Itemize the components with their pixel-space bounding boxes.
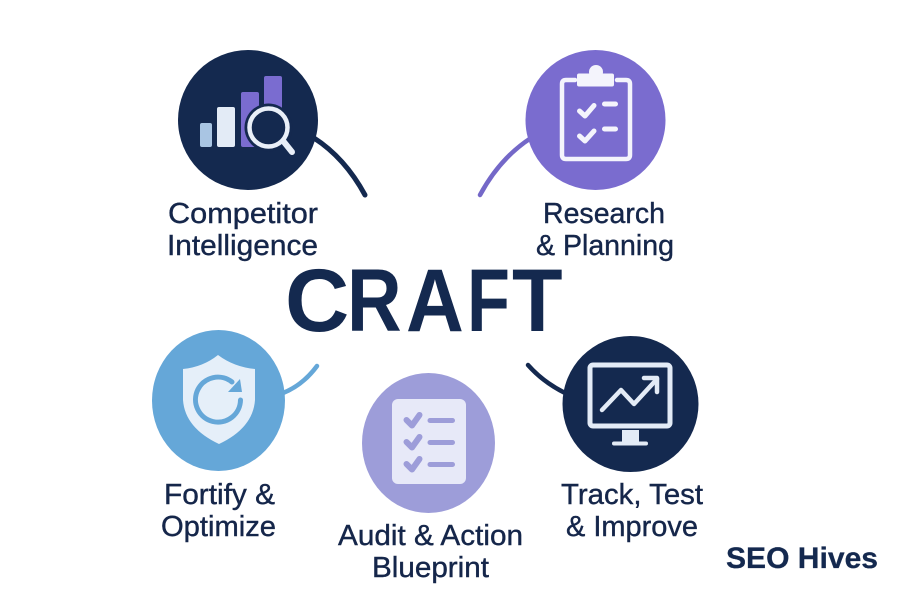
label: Competitor Intelligence: Competitor	[168, 198, 318, 230]
title	[285, 250, 563, 351]
brand wordmark: SEO Hives: SEO Hives	[726, 542, 878, 575]
label: Fortify and Optimize: Optimize	[161, 511, 276, 543]
title: R	[347, 250, 402, 350]
icon: competitor intelligence circle with bars and magnifier	[178, 50, 318, 190]
label: Track, Test and Improve	[561, 479, 703, 543]
connector: research and planning	[480, 138, 531, 195]
label: Competitor Intelligence	[167, 198, 318, 262]
icon: research and planning circle with clipboard	[526, 50, 666, 190]
label: Research and Planning: Research	[543, 198, 665, 230]
label: Research and Planning	[536, 198, 674, 262]
icon: audit and action blueprint circle with checklist	[362, 373, 495, 513]
title: F	[467, 250, 510, 350]
label: Audit and Action Blueprint	[338, 520, 523, 584]
icon: track, test and improve circle with monitor	[562, 336, 698, 472]
title: C	[285, 250, 349, 350]
label: Track, Test and Improve: Track, Test	[561, 479, 703, 511]
connector: track, test and improve	[528, 365, 565, 393]
connector: fortify and optimize	[283, 366, 317, 393]
label: Competitor Intelligence: Intelligence	[167, 230, 318, 262]
label: Research and Planning: & Planning	[536, 230, 674, 262]
label: Audit and Action Blueprint: Audit & Action	[338, 520, 523, 552]
title: A	[406, 250, 464, 350]
label: Track, Test and Improve: & Improve	[566, 511, 698, 543]
label: Fortify and Optimize: Fortify &	[164, 479, 275, 511]
icon: fortify and optimize circle with shield	[152, 330, 285, 471]
connector: competitor intelligence	[314, 138, 365, 195]
label: Fortify and Optimize	[161, 479, 276, 543]
label: Audit and Action Blueprint: Blueprint	[372, 552, 489, 584]
title: T	[512, 251, 563, 351]
